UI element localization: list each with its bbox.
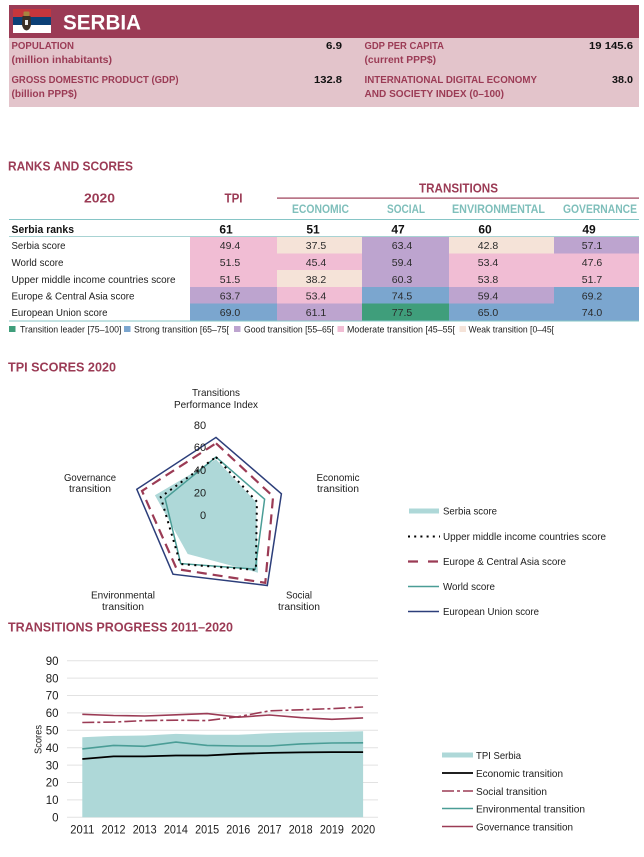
legend: transition categories: Weak transition [0–45[ (468, 324, 554, 336)
chart: y axis labels: 40 (46, 743, 58, 755)
indicator: GDP per capita: 19 145.6 (589, 40, 633, 52)
legend: transition categories (9, 324, 554, 336)
chart: x axis labels: 2013 (133, 824, 157, 836)
radar: scale labels: 60 (194, 442, 206, 454)
legend: radar chart: World score (443, 581, 495, 593)
row: European Union score (9, 304, 639, 322)
row: European Union score: 61.1 (306, 307, 326, 319)
chart: economic transition line (82, 752, 363, 759)
chart: y axis labels: 0 (52, 812, 58, 824)
row: Serbia score (12, 237, 639, 254)
legend: radar chart: Serbia score (443, 506, 497, 518)
row: Europe and Central Asia score: Europe & Central Asia score (12, 290, 135, 302)
row: Serbia ranks: 51 (306, 222, 320, 236)
radar: scale labels (194, 420, 206, 522)
radar: scale labels: 20 (194, 488, 206, 500)
row: Europe and Central Asia score (12, 287, 639, 304)
row: Serbia ranks: Serbia ranks (12, 224, 74, 236)
chart: TPI Serbia area (82, 731, 363, 817)
chart: x axis labels (70, 824, 375, 836)
row: World score: 47.6 (582, 257, 602, 269)
chart: y axis labels: 90 (46, 656, 58, 668)
chart: environmental transition line (82, 742, 363, 749)
chart: x axis labels: 2019 (320, 824, 344, 836)
indicator: GDP: (billion PPP$) (12, 88, 77, 100)
indicator: population: POPULATION (12, 40, 74, 52)
row: Serbia score: Serbia score (12, 240, 66, 252)
table header (9, 182, 639, 220)
row: European Union score: 69.0 (220, 307, 240, 319)
radar: axis label social: transition (278, 601, 320, 613)
radar: axis label social (278, 590, 320, 613)
row: Serbia score: 57.1 (582, 240, 602, 252)
row: Upper middle income countries score: 60.3 (392, 274, 412, 286)
indicator: population: 6.9 (326, 40, 342, 52)
chart: x axis labels: 2011 (70, 824, 94, 836)
indicator: GDP: GROSS DOMESTIC PRODUCT (GDP) (12, 74, 178, 86)
radar: scale labels: 80 (194, 420, 206, 432)
radar: axis label economic (316, 472, 360, 495)
chart: y axis labels: 20 (46, 778, 58, 790)
row: Serbia score: 42.8 (478, 240, 498, 252)
chart: y axis labels: 60 (46, 708, 58, 720)
row: World score: 59.4 (392, 257, 412, 269)
table header: SOCIAL (387, 204, 425, 216)
indicator: digital economy index: INTERNATIONAL DIGITAL ECONOMY (364, 74, 537, 86)
row: Serbia ranks: 60 (478, 222, 492, 236)
heading: transitions progress: TRANSITIONS PROGRESS 2011–2020 (8, 620, 233, 634)
radar: European Union score (137, 437, 281, 586)
row: Upper middle income countries score (12, 270, 639, 287)
row: Upper middle income countries score: 38.2 (306, 274, 326, 286)
indicator: GDP per capita: (current PPP$) (364, 54, 436, 66)
radar: axis label governance: Governance (64, 472, 116, 484)
table header: ECONOMIC (292, 204, 349, 216)
row: Serbia score: 37.5 (306, 240, 326, 252)
radar chart (64, 387, 360, 613)
chart: x axis labels: 2018 (289, 824, 313, 836)
row: Serbia score: 63.4 (392, 240, 412, 252)
table header: 2020 (84, 192, 115, 206)
row: World score (12, 254, 639, 270)
legend: line chart: TPI Serbia (476, 750, 521, 762)
row: World score: 45.4 (306, 257, 326, 269)
row: Europe and Central Asia score: 53.4 (306, 290, 326, 302)
chart: x axis labels: 2020 (351, 824, 375, 836)
radar: axis label governance: transition (69, 483, 111, 495)
panel: ranks and scores table (9, 182, 639, 322)
chart: grid lines (67, 661, 378, 817)
chart: y axis labels: 10 (46, 795, 58, 807)
row: European Union score: European Union score (12, 307, 108, 319)
radar: axis label governance (64, 472, 116, 495)
row: Europe and Central Asia score: 74.5 (392, 290, 412, 302)
row: Serbia ranks: 49 (582, 222, 596, 236)
row: Serbia ranks: 47 (391, 222, 405, 236)
table header: ENVIRONMENTAL (452, 204, 545, 216)
indicator: GDP (12, 74, 342, 100)
legend: line chart (442, 750, 585, 834)
radar: axis label TPI (174, 387, 259, 411)
chart: governance transition line (82, 714, 363, 719)
indicator: population (12, 40, 342, 66)
table header: TPI (224, 192, 242, 206)
row: World score: 51.5 (220, 257, 240, 269)
row: World score: 53.4 (478, 257, 498, 269)
radar: axis label economic: Economic (316, 472, 360, 484)
row: Serbia ranks (9, 222, 639, 237)
panel: key indicators (9, 38, 639, 107)
radar: axis label social: Social (286, 590, 312, 602)
table header: GOVERNANCE (563, 204, 637, 216)
radar: axis label economic: transition (317, 483, 359, 495)
line chart: transitions progress (32, 656, 378, 836)
row: World score: World score (12, 257, 64, 269)
legend: line chart: Environmental transition (476, 804, 585, 816)
chart: x axis labels: 2012 (102, 824, 126, 836)
radar: Serbia score area (155, 459, 258, 573)
heading: TPI scores 2020: TPI SCORES 2020 (8, 360, 116, 374)
chart: x axis labels: 2014 (164, 824, 188, 836)
legend: radar chart (408, 506, 606, 618)
legend: transition categories: Transition leader [75–100] (20, 324, 122, 336)
legend: radar chart: Upper middle income countries score (443, 531, 606, 543)
row: European Union score: 77.5 (392, 307, 412, 319)
chart: y axis labels: 50 (46, 726, 58, 738)
legend: transition categories: Moderate transition [45–55[ (347, 324, 455, 336)
radar: axis label environmental (91, 590, 155, 613)
legend: line chart: Social transition (476, 786, 547, 798)
chart: y axis labels (46, 656, 58, 824)
row: Upper middle income countries score: 51.5 (220, 274, 240, 286)
indicator: digital economy index: 38.0 (612, 74, 633, 86)
chart: x axis labels: 2017 (258, 824, 282, 836)
row: Upper middle income countries score: 51.7 (582, 274, 602, 286)
row: Upper middle income countries score: Upper middle income countries score (12, 274, 176, 286)
radar: Europe and Central Asia score (142, 443, 273, 583)
panel: country header (9, 5, 639, 38)
indicator: GDP per capita (364, 40, 633, 66)
table header: TRANSITIONS (419, 182, 498, 196)
icon: Serbian flag (13, 9, 51, 33)
legend: line chart: Economic transition (476, 768, 563, 780)
chart: social transition line (82, 707, 363, 722)
chart: y axis labels: 70 (46, 691, 58, 703)
radar: scale labels: 40 (194, 465, 206, 477)
legend: radar chart: Europe & Central Asia score (443, 556, 566, 568)
radar: world score (165, 457, 265, 569)
legend: line chart: Governance transition (476, 822, 573, 834)
row: Serbia ranks: 61 (219, 222, 233, 236)
chart: y axis labels: 80 (46, 673, 58, 685)
chart: y axis title: Scores (32, 725, 44, 754)
radar: axis label TPI: Transitions (192, 387, 240, 399)
row: Serbia score: 49.4 (220, 240, 240, 252)
radar: axis label environmental: transition (102, 601, 144, 613)
radar: upper middle income score (161, 457, 257, 570)
chart: x axis labels: 2016 (226, 824, 250, 836)
heading: ranks and scores: RANKS AND SCORES (8, 160, 133, 174)
chart: y axis labels: 30 (46, 760, 58, 772)
title: Serbia: SERBIA (63, 12, 141, 34)
legend: transition categories: Good transition [55–65[ (244, 324, 334, 336)
indicator: population: (million inhabitants) (12, 54, 112, 66)
radar: axis label TPI: Performance Index (174, 399, 259, 411)
legend: transition categories: Strong transition [65–75[ (134, 324, 229, 336)
indicator: GDP per capita: GDP PER CAPITA (364, 40, 444, 52)
radar: scale labels: 0 (200, 510, 206, 522)
indicator: digital economy index: AND SOCIETY INDEX (0–100) (364, 88, 504, 100)
row: European Union score: 74.0 (582, 307, 602, 319)
row: European Union score: 65.0 (478, 307, 498, 319)
row: Europe and Central Asia score: 69.2 (582, 290, 602, 302)
radar: axis label environmental: Environmental (91, 590, 155, 602)
legend: radar chart: European Union score (443, 606, 539, 618)
row: Europe and Central Asia score: 59.4 (478, 290, 498, 302)
indicator: digital economy index (364, 74, 633, 100)
row: Upper middle income countries score: 53.8 (478, 274, 498, 286)
row: Europe and Central Asia score: 63.7 (220, 290, 240, 302)
chart: x axis labels: 2015 (195, 824, 219, 836)
indicator: GDP: 132.8 (314, 74, 342, 86)
